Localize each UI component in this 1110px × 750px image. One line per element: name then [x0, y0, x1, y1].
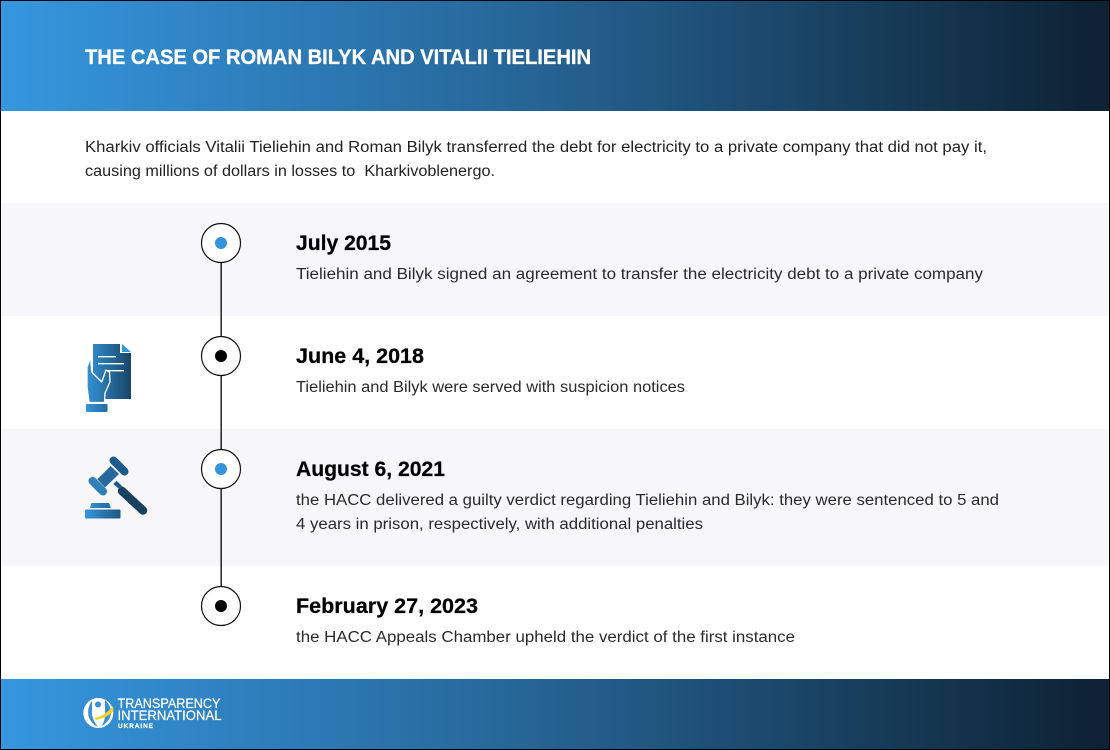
- event: July 2015: [202, 224, 983, 283]
- event: February 27, 2023: [202, 586, 795, 646]
- intro text: Kharkiv officials Vitalii Tieliehin and Roman Bilyk transferred the debt for electricity to a private company that did not pay it,: [85, 139, 987, 156]
- description: August 6, 2021: the HACC delivered a guilty verdict regarding Tieliehin and Bilyk: they were sentenced to 5 and: [296, 492, 999, 509]
- logo: Transparency International Ukraine: [83, 696, 222, 730]
- logo mark: [83, 698, 114, 728]
- description: August 6, 2021: [296, 492, 999, 533]
- date: July 2015: July 2015: [296, 232, 391, 255]
- marker: August 6, 2021: [202, 450, 240, 488]
- panel: row backgrounds: [0, 203, 1110, 566]
- intro text: [85, 139, 987, 180]
- header band: [0, 0, 1110, 111]
- marker: June 4, 2018: [202, 336, 240, 376]
- footer band: [0, 679, 1110, 750]
- logo text: TRANSPARENCY: [118, 696, 220, 711]
- title: THE CASE OF ROMAN BILYK AND VITALII TIELIEHIN: [85, 46, 591, 69]
- event: August 6, 2021: [202, 450, 999, 533]
- marker: February 27, 2023: [202, 586, 240, 626]
- description: June 4, 2018: Tieliehin and Bilyk were served with suspicion notices: [296, 379, 685, 396]
- date: June 4, 2018: June 4, 2018: [296, 345, 424, 368]
- description: August 6, 2021: 4 years in prison, respectively, with additional penalties: [296, 516, 703, 533]
- logo text: INTERNATIONAL: [118, 708, 222, 723]
- marker: July 2015: [202, 224, 240, 262]
- description: February 27, 2023: the HACC Appeals Chamber upheld the verdict of the first instance: [296, 629, 795, 646]
- icon: hand holding document: [86, 344, 131, 412]
- icon: judge gavel: [85, 460, 143, 518]
- event: June 4, 2018: [202, 336, 685, 396]
- logo text: UKRAINE: [118, 723, 154, 730]
- description: July 2015: Tieliehin and Bilyk signed an agreement to transfer the electricity debt to a private company: [296, 266, 983, 283]
- intro text: causing millions of dollars in losses to Kharkivoblenergo.: [85, 163, 495, 180]
- timeline line: [220, 243, 222, 606]
- logo text: [118, 696, 222, 730]
- date: August 6, 2021: August 6, 2021: [296, 458, 445, 481]
- date: February 27, 2023: February 27, 2023: [296, 595, 478, 618]
